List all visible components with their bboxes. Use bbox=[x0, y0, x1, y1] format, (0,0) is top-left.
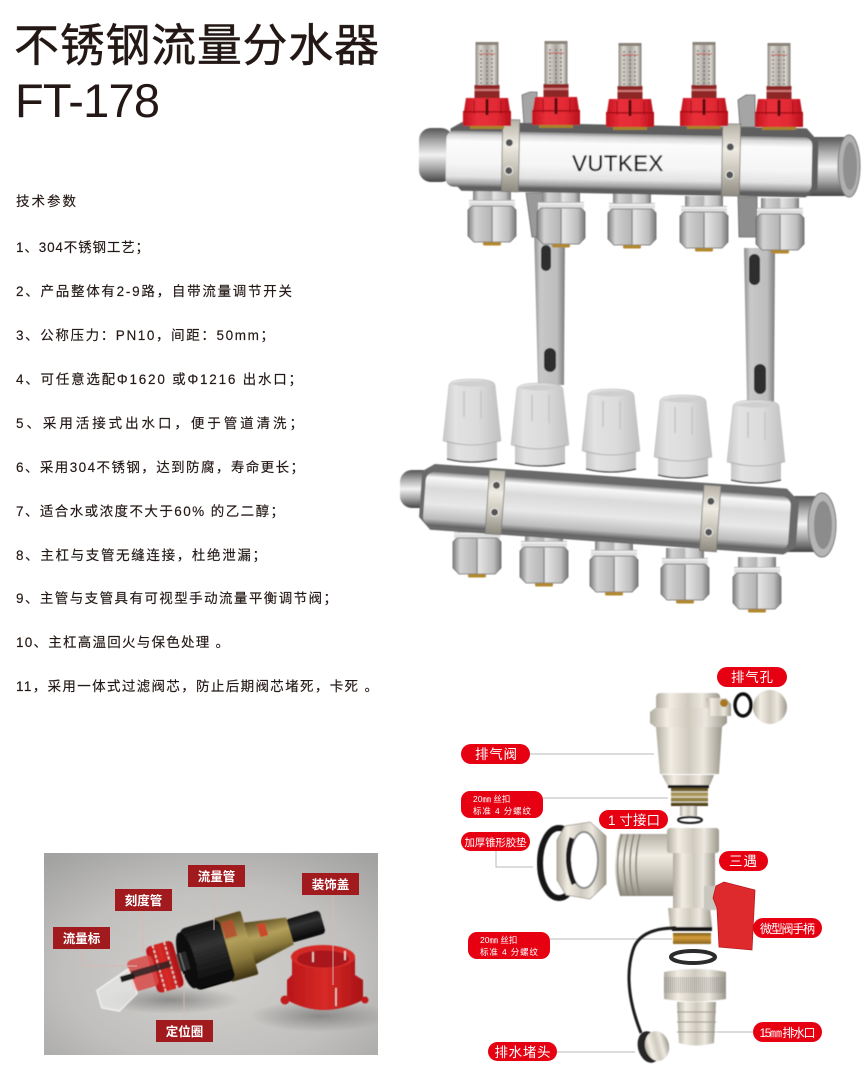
label: 流量管 bbox=[188, 865, 245, 887]
callout: 20mm thread upper: 标准 4 分螺纹 bbox=[473, 806, 531, 816]
callout: 微型阀手柄: 微型阀手柄 bbox=[760, 922, 815, 936]
title: product name and model: 不锈钢流量分水器 bbox=[14, 20, 379, 71]
drain washer bbox=[671, 951, 715, 963]
label: 装饰盖: 装饰盖 bbox=[312, 877, 349, 892]
title: product name and model bbox=[14, 20, 379, 127]
callout: 20mm thread upper: 20㎜ 丝扣 bbox=[473, 794, 510, 804]
gasket and union nut bbox=[540, 822, 606, 899]
flowmeters with red caps bbox=[463, 41, 803, 130]
bottom manifold end fittings bbox=[400, 470, 836, 557]
tee body bbox=[667, 828, 719, 944]
red decorative cap bbox=[280, 945, 368, 1010]
technical parameters list: 8、主杠与支管无缝连接，杜绝泄漏； bbox=[16, 547, 266, 564]
top manifold body bbox=[445, 118, 819, 198]
technical parameters list: 11，采用一体式过滤阀芯，防止后期阀芯堵死，卡死 。 bbox=[16, 679, 378, 694]
technical parameters list: 6、采用304不锈钢，达到防腐，寿命更长； bbox=[16, 459, 304, 476]
callout: 加厚锥形胶垫: 加厚锥形胶垫 bbox=[464, 836, 527, 849]
callout: 15mm 排水口: 15㎜ 排水口 bbox=[760, 1026, 816, 1040]
panel: flowmeter parts photo bbox=[44, 853, 390, 1055]
callout: 排水堵头: 排水堵头 bbox=[494, 1045, 550, 1060]
cast shadows bbox=[125, 988, 378, 1030]
air vent valve body bbox=[650, 693, 731, 823]
technical parameters list: 技术参数 bbox=[16, 193, 76, 209]
photo background bbox=[44, 853, 378, 1055]
callout: 20mm thread lower: 标准 4 分螺纹 bbox=[480, 947, 538, 957]
exploded view: air vent and tee assembly bbox=[461, 667, 822, 1065]
label: 装饰盖 bbox=[302, 873, 359, 895]
callout: 排气阀: 排气阀 bbox=[475, 747, 517, 762]
label: 刻度管 bbox=[115, 889, 172, 911]
side thread of tee bbox=[615, 834, 675, 896]
label: 流量管: 流量管 bbox=[198, 869, 235, 884]
brand label VUTKEX: VUTKEX bbox=[572, 151, 664, 176]
technical parameters list: 10、主杠高温回火与保色处理 。 bbox=[16, 634, 229, 650]
leader lines bbox=[496, 754, 753, 1052]
callout: 15mm 排水口 bbox=[753, 1022, 822, 1042]
technical parameters list: 2、产品整体有2-9路，自带流量调节开关 bbox=[16, 284, 292, 299]
technical parameters list: 7、适合水或浓度不大于60% 的乙二醇； bbox=[16, 503, 284, 520]
callout pills bbox=[461, 667, 822, 1061]
grey return-valve knobs bbox=[443, 379, 785, 483]
callout: 排气孔 bbox=[717, 667, 787, 687]
drain plug with cord bbox=[629, 928, 676, 1065]
part leader lines bbox=[82, 887, 333, 1020]
technical parameters list: 1、304不锈钢工艺； bbox=[16, 240, 149, 256]
callout: 排气阀 bbox=[461, 744, 530, 764]
top manifold end fittings bbox=[419, 128, 860, 197]
label: 刻度管: 刻度管 bbox=[125, 893, 162, 908]
bottom manifold outlet fittings bbox=[453, 522, 781, 612]
callout: 三遇: 三遇 bbox=[729, 854, 757, 869]
label: 定位圈 bbox=[156, 1020, 213, 1042]
title: product name and model: FT-178 bbox=[15, 74, 160, 127]
callout: 1 寸接口 bbox=[599, 810, 668, 829]
technical parameters list bbox=[16, 193, 378, 694]
callout: 1 寸接口: 1 寸接口 bbox=[608, 812, 660, 828]
callout: 20mm thread lower bbox=[468, 932, 550, 959]
callout: 微型阀手柄 bbox=[753, 918, 822, 938]
red valve handle bbox=[713, 882, 755, 950]
callout: 三遇 bbox=[719, 851, 768, 871]
technical parameters list: 4、可任意选配Φ1620 或Φ1216 出水口； bbox=[16, 371, 302, 388]
bottom manifold body bbox=[418, 463, 800, 557]
vent o-ring and knurled cap bbox=[735, 690, 787, 724]
flowmeter cartridge bbox=[96, 910, 326, 1012]
knurled nut and barbed drain outlet bbox=[664, 969, 726, 1046]
top manifold outlet fittings bbox=[468, 190, 804, 254]
callout: 20mm thread lower: 20㎜ 丝扣 bbox=[480, 935, 517, 945]
callout: 加厚锥形胶垫 bbox=[461, 832, 530, 851]
label: 定位圈: 定位圈 bbox=[166, 1024, 203, 1039]
technical parameters list: 5、采用活接式出水口，便于管道清洗； bbox=[16, 415, 303, 432]
product image: stainless steel manifold bbox=[400, 41, 860, 612]
callout: 排水堵头 bbox=[488, 1042, 557, 1061]
technical parameters list: 9、主管与支管具有可视型手动流量平衡调节阀； bbox=[16, 591, 337, 607]
label: 流量标: 流量标 bbox=[63, 931, 101, 946]
callout: 20mm thread upper bbox=[461, 791, 543, 818]
mounting bracket stems bbox=[522, 92, 775, 402]
callout: 排气孔: 排气孔 bbox=[731, 670, 774, 685]
technical parameters list: 3、公称压力：PN10，间距：50mm； bbox=[16, 328, 274, 344]
label: 流量标 bbox=[53, 927, 110, 949]
